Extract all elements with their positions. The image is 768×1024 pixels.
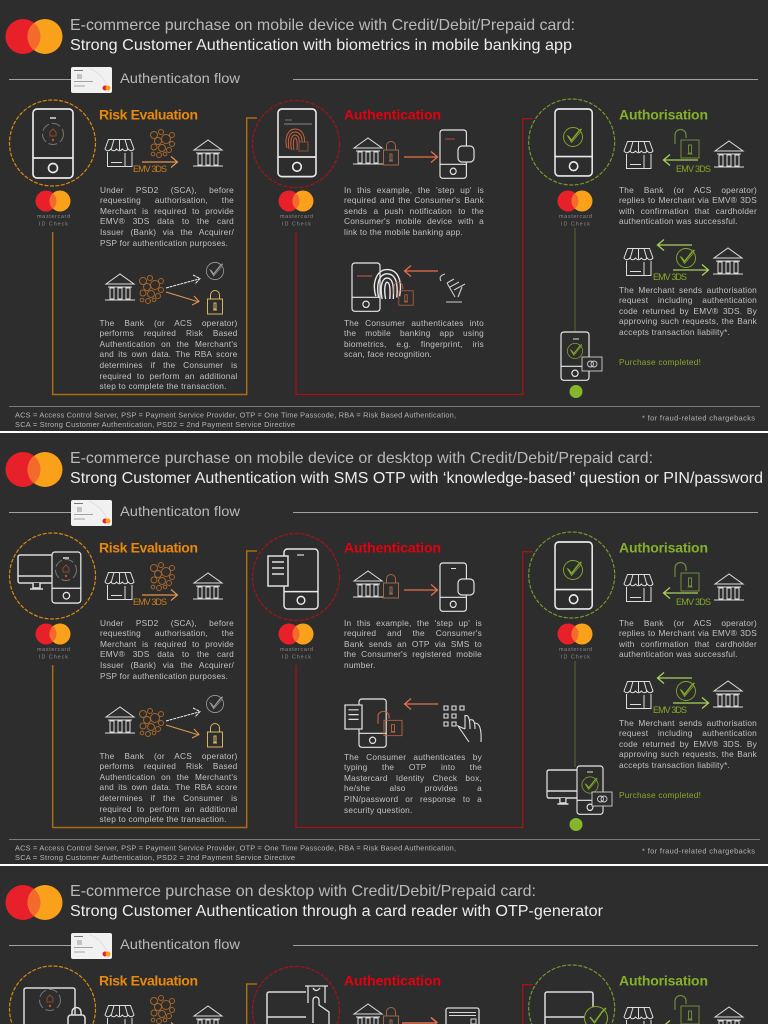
text: consumer types OTP: security question. [344,805,413,815]
text: bank replies to merchant: with confirmation that cardholder [619,639,757,649]
text: step up push notification: In this example, the 'step up' is [344,184,484,194]
text: risk evaluation data request: Merchant is required to provide [100,639,234,649]
connector: risk to authentication [247,984,257,1024]
icon row: merchant sends data to bank [105,562,223,607]
icon row: consumer types OTP on keypad [345,698,481,747]
heading: authentication flow: Authenticaton flow [120,70,241,86]
heading: authorisation: Authorisation [619,972,708,988]
text: risk evaluation data request: EMV® 3DS data to the card [100,649,234,659]
text: merchant authorisation request: The Merchant sends authorisation [619,284,757,294]
text: risk based authentication: determines if the Consumer is [100,360,238,370]
icon row: bank replies to merchant: EMV 3DS [676,164,711,174]
icon row: consumer fingerprint in banking app [352,263,465,311]
title: authentication method: Strong Customer Authentication with SMS OTP with ‘knowledge-based’ question or PIN/password [70,470,763,487]
text: purchase completed: Purchase completed! [619,790,701,800]
text: consumer types OTP: Mastercard Identity Check box, [344,773,482,783]
icon row: merchant sends authorisation request [624,240,743,282]
text: step up OTP via SMS: Bank sends an OTP via SMS to [344,639,482,649]
heading: authentication: Authentication [344,972,441,988]
text: risk based authentication: required to perform an additional [100,371,238,381]
text: risk based authentication: The Bank (or ACS operator) [100,750,238,760]
text: risk based authentication: step to complete the transaction. [100,814,227,824]
panel: section 3 card reader with OTP generator [0,866,768,1024]
text: merchant authorisation request: accepts transaction liability*. [619,760,730,770]
title: authentication method: Strong Customer Authentication through a card reader with OTP-generator [70,903,604,920]
text: step up push notification: Consumer's mobile device with a [344,216,484,226]
icon: payment card [71,500,112,526]
text: step up OTP via SMS: number. [344,660,376,670]
heading: risk evaluation: Risk Evaluation [99,106,198,122]
logo: ID Check risk column: mastercard [37,647,70,653]
text: consumer authenticates biometrics: scan, face recognition. [344,349,432,359]
text: merchant authorisation request: The Merchant sends authorisation [619,718,757,728]
text: bank replies to merchant: with confirmation that cardholder [619,206,757,216]
connector: risk to authentication [53,551,257,828]
text: risk evaluation data request [100,184,234,248]
connector: authentication to authorisation [296,119,533,394]
text: risk based authentication: and its own data. The RBA score [100,782,238,792]
icon: payment card [71,933,112,959]
footnote: chargebacks: * for fraud-related chargebacks [642,414,755,422]
connector: risk to authentication [53,118,257,394]
heading: authentication flow: Authenticaton flow [120,503,241,519]
text: bank replies to merchant [619,618,757,659]
footnote: abbreviations line one: ACS = Access Control Server, PSP = Payment Service Provider, OTP = One Time Passcode, RBA = Risk Based Authentication, [15,844,456,852]
text: consumer types OTP [344,752,482,815]
logo: ID Check risk column: mastercard [37,214,70,220]
connector: authentication to authorisation [296,552,533,828]
icon row: bank replies to merchant: EMV 3DS [676,597,711,607]
logo: Mastercard header [6,19,62,54]
logo: ID Check risk column: ID Check [39,222,68,228]
logo: ID Check authentication column [278,624,314,660]
heading: authentication: Authentication [344,106,441,122]
text: merchant authorisation request: request including authentication [619,728,757,738]
panel: section 1 biometrics in mobile banking app [0,0,768,431]
heading: authentication: Authentication [344,540,441,556]
text: bank replies to merchant [619,184,757,226]
text: step up OTP via SMS: In this example, the 'step up' is [344,618,482,628]
text: risk based authentication: The Bank (or ACS operator) [100,318,238,328]
icon row: merchant sends authorisation request: EMV 3DS [653,705,687,715]
logo: ID Check risk column [36,624,70,660]
text: step up OTP via SMS [344,618,482,670]
text: risk evaluation data request: PSP for authentication purposes. [100,671,228,681]
footnote: abbreviations line two: SCA = Strong Customer Authentication, PSD2 = 2nd Payment Service Directive [15,853,295,862]
icon row: bank replies to merchant [624,130,744,174]
text: bank replies to merchant: replies to Merchant via EMV® 3DS [619,195,757,205]
icon row: merchant sends authorisation request [624,672,743,715]
text: consumer authenticates biometrics [344,318,484,359]
text: step up push notification [344,184,484,237]
icon: purchase completed phone [561,332,602,398]
panel: section 2 SMS OTP [0,433,768,864]
text: merchant authorisation request: accepts transaction liability*. [619,327,730,337]
text: risk based authentication: and its own data. The RBA score [100,349,238,359]
text: risk evaluation data request: Under PSD2 (SCA), before [100,184,234,194]
icon row: merchant sends authorisation request: EMV 3DS [653,272,687,282]
text: bank replies to merchant: authentication was successful. [619,649,738,659]
icon: authorisation desktop with check in circle [529,965,615,1024]
text: risk evaluation data request: PSP for authentication purposes. [100,238,228,248]
icon row: bank risk based authentication [105,262,224,314]
icon row: bank sends OTP via SMS [353,563,474,611]
text: merchant authorisation request: request including authentication [619,295,757,305]
text: risk based authentication [100,318,238,391]
icon row: bank replies to merchant [624,562,744,607]
text: consumer authenticates biometrics: the mobile banking app using [344,328,484,338]
connector: authentication to authorisation [523,985,533,1024]
icon: risk evaluation desktop and phone in circle [10,533,96,619]
text: risk based authentication: step to complete the transaction. [100,381,227,391]
logo: ID Check risk column: ID Check [39,654,68,660]
text: merchant authorisation request: code returned by EMV® 3DS. By [619,306,757,316]
logo: ID Check risk column [36,190,70,228]
heading: risk evaluation: Risk Evaluation [99,540,198,556]
text: risk based authentication: performs required Risk Based [100,761,238,771]
logo: ID Check authorisation column: mastercard [559,647,592,653]
icon row: merchant sends data to bank [105,130,223,174]
text: merchant authorisation request: approving such requests, the Bank [619,316,757,326]
logo: ID Check authentication column [278,190,314,228]
heading: authorisation: Authorisation [619,106,708,122]
icon row: merchant sends data to bank: EMV 3DS [133,597,167,607]
icon row: merchant sends data to bank: EMV 3DS [133,164,167,174]
text: risk evaluation data request: Under PSD2 (SCA), before [100,618,234,628]
logo: ID Check authentication column: mastercard [280,647,313,653]
text: risk based authentication [100,750,238,824]
logo: ID Check authorisation column: ID Check [561,222,590,228]
text: risk evaluation data request: requesting authorisation, the [100,195,234,205]
text: step up push notification: link to the mobile banking app. [344,227,463,237]
text: risk based authentication: Authentication on the Merchant's [100,339,238,349]
icon: purchase completed desktop and phone [547,766,612,831]
text: consumer types OTP: he/she also provides a [344,783,482,793]
text: step up OTP via SMS: required and the Consumer's [344,628,482,638]
logo: Mastercard header [6,885,62,920]
text: step up OTP via SMS: the Consumer's registered mobile [344,649,482,659]
logo: ID Check authorisation column: ID Check [561,654,590,660]
icon row: bank replies to merchant [624,996,744,1024]
icon row: merchant sends data to bank [105,996,223,1024]
title: purchase type: E-commerce purchase on mobile device or desktop with Credit/Debit/Prepaid card: [70,450,653,467]
text: consumer types OTP: typing the OTP into the [344,762,482,772]
title: purchase type: E-commerce purchase on desktop with Credit/Debit/Prepaid card: [70,883,536,900]
footnote: abbreviations line one: ACS = Access Control Server, PSP = Payment Service Provider, OTP = One Time Passcode, RBA = Risk Based Authentication, [15,410,456,420]
text: risk evaluation data request [100,618,234,681]
footnote: abbreviations line two: SCA = Strong Customer Authentication, PSD2 = 2nd Payment Service Directive [15,420,295,429]
text: risk based authentication: Authentication on the Merchant's [100,772,238,782]
title: purchase type: E-commerce purchase on mobile device with Credit/Debit/Prepaid card: [70,17,575,34]
icon: risk evaluation phone in circle [10,100,96,186]
icon row: bank sends push notification [353,130,474,178]
logo: ID Check authorisation column: mastercard [559,214,592,220]
text: consumer authenticates biometrics: The Consumer authenticates into [344,318,484,328]
icon: authentication phone and document in circle [252,534,340,620]
text: consumer types OTP: PIN/password or response to a [344,794,482,804]
title: authentication method: Strong Customer Authentication with biometrics in mobile banking app [70,37,572,54]
icon: authentication phone in circle [252,100,340,188]
icon: authorisation phone in circle [529,532,615,618]
text: bank replies to merchant: replies to Merchant via EMV® 3DS [619,628,757,638]
text: consumer authenticates biometrics: biometrics, e.g. fingerprint, iris [344,339,484,349]
text: risk based authentication: required to perform an additional [100,804,238,814]
logo: ID Check authentication column: ID Check [282,222,311,228]
text: step up push notification: sends a push notification to the [344,206,484,216]
text: merchant authorisation request [619,718,757,770]
text: merchant authorisation request [619,284,757,337]
text: risk evaluation data request: Merchant is required to provide [100,206,234,216]
text: merchant authorisation request: code returned by EMV® 3DS. By [619,739,757,749]
text: risk based authentication: determines if the Consumer is [100,793,238,803]
text: bank replies to merchant: authentication was successful. [619,216,738,226]
connector: authorisation to completed [574,661,576,767]
text: bank replies to merchant: The Bank (or ACS operator) [619,618,757,628]
text: risk evaluation data request: Issuer (Bank) via the Acquirer/ [100,227,234,237]
text: risk based authentication: performs required Risk Based [100,328,238,338]
text: risk evaluation data request: Issuer (Bank) via the Acquirer/ [100,660,234,670]
text: bank replies to merchant: The Bank (or ACS operator) [619,184,757,194]
text: purchase completed: Purchase completed! [619,356,701,366]
icon: authentication desktop with card reader in circle [252,966,340,1024]
heading: risk evaluation: Risk Evaluation [99,972,198,988]
heading: authorisation: Authorisation [619,540,708,556]
icon row: bank challenges card reader [353,1004,479,1024]
logo: ID Check authorisation column [558,190,592,228]
logo: Mastercard header [6,452,62,487]
logo: ID Check authorisation column [558,624,592,660]
text: risk evaluation data request: requesting authorisation, the [100,628,234,638]
icon: authorisation phone in circle [529,99,615,185]
logo: ID Check authentication column: ID Check [282,654,311,660]
logo: ID Check authentication column: mastercard [280,214,313,220]
text: step up push notification: required and the Consumer's Bank [344,195,484,205]
text: consumer types OTP: The Consumer authenticates by [344,752,482,762]
icon row: bank risk based authentication [105,695,224,747]
icon: risk evaluation desktop with lock in circle [10,966,96,1024]
icon: payment card [71,67,112,93]
footnote: chargebacks: * for fraud-related chargebacks [642,846,755,856]
connector: authorisation to completed [574,228,576,334]
text: risk evaluation data request: EMV® 3DS data to the card [100,216,234,226]
heading: authentication flow: Authenticaton flow [120,936,241,952]
text: merchant authorisation request: approving such requests, the Bank [619,749,757,759]
